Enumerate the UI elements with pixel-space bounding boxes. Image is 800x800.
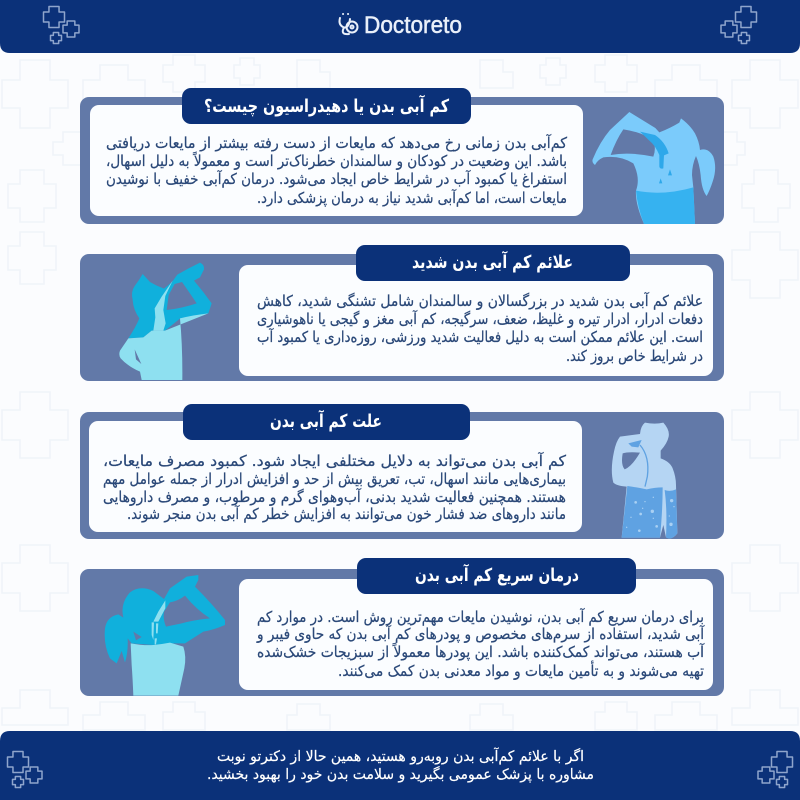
icon: plus cluster right (721, 6, 756, 44)
illustration: man drinking water (119, 263, 212, 380)
text card (89, 421, 582, 532)
heading pill (357, 558, 636, 594)
text card (239, 265, 713, 376)
icon: plus cluster left (44, 6, 79, 44)
heading pill: درمان سریع کم آبی بدن (415, 563, 579, 586)
heading pill (183, 404, 470, 440)
body text: آب هستند، می‌تواند کمک‌کننده باشد. این پودرها معمولاً از سبزیجات خشک‌شده (257, 642, 705, 662)
body text: مانند داروهای ضد فشار خون می‌توانند به افزایش خطر کم آبی بدن منجر شوند. (127, 505, 566, 523)
body text: تهیه می‌شوند و به تأمین مایعات و مواد معدنی بدن کمک می‌کنند. (338, 660, 704, 680)
body text: بیماری‌هایی مانند اسهال، تب، تعریق بیش از حد و افزایش ادرار از جمله عوامل مهم (103, 470, 566, 488)
body text: هستند. همچنین فعالیت شدید بدنی، آب‌وهوای گرم و مرطوب، و مصرف داروهایی (103, 488, 566, 506)
logo: stethoscope icon (340, 14, 358, 34)
heading pill (182, 88, 471, 124)
body text: استفراغ یا کمبود آب در شرایط خاص ایجاد می‌شود. درمان کم‌آبی خفیف با نوشیدن (106, 170, 567, 188)
body text (256, 608, 705, 680)
call to action text: مشاوره با پزشک عمومی بگیرید و سلامت بدن خود را بهبود بخشید. (207, 766, 594, 783)
body text: برای درمان سریع کم آبی بدن، نوشیدن مایعات مهم‌ترین روش است. در موارد کم (257, 608, 704, 626)
call to action text: اگر با علائم کم‌آبی بدن روبه‌رو هستید، همین حالا از دکترتو نوبت (217, 747, 584, 765)
panel: what is dehydration (80, 88, 724, 224)
header bar (0, 0, 800, 53)
text card (90, 105, 583, 216)
body text: کم‌آبی بدن زمانی رخ می‌دهد که مایعات از دست رفته بیشتر از مایعات دریافتی (106, 134, 568, 152)
illustration: person with water level (612, 423, 677, 538)
heading pill: علائم کم آبی بدن شدید (412, 250, 573, 273)
heading pill (356, 245, 630, 281)
body text: آبی شدید، استفاده از سرم‌های مخصوص و پودرهای کم آبی بدن که حاوی فیبر و (256, 625, 705, 644)
footer bar (0, 731, 800, 800)
body text: دفعات ادرار، ادرار تیره و غلیظ، ضعف، سرگیجه، کم آبی مغز و گیجی یا ناهوشیاری (257, 310, 703, 328)
body text: کم آبی بدن می‌تواند به دلایل مختلفی ایجاد شود. کمبود مصرف مایعات، (103, 452, 567, 470)
panel: quick treatment (80, 558, 724, 696)
body text (106, 134, 568, 208)
body text (103, 452, 567, 523)
panel: severe symptoms (80, 245, 724, 381)
icon: plus cluster footer left (8, 752, 42, 788)
body text: علائم کم آبی بدن شدید در بزرگسالان و سالمندان شامل تشنگی شدید، کاهش (257, 292, 703, 310)
body text: در شرایط خاص بروز کند. (566, 347, 703, 365)
call to action text (207, 747, 594, 783)
text card (239, 579, 713, 690)
illustration: woman pouring water (105, 575, 225, 696)
icon: plus cluster footer right (758, 752, 792, 788)
body text (257, 292, 703, 365)
body text: است. این علائم ممکن است به دلیل فعالیت شدید ورزشی، روزه‌داری یا کمبود آب (257, 328, 703, 346)
logo: wordmark: Doctoreto (364, 12, 462, 39)
heading pill: کم آبی بدن یا دهیدراسیون چیست؟ (204, 94, 449, 117)
body text: باشد. این وضعیت در کودکان و سالمندان خطرناک‌تر است و معمولاً به دلیل اسهال، (106, 151, 567, 170)
illustration: woman drinking water (592, 112, 715, 224)
panel: causes (80, 404, 724, 539)
heading pill: علت کم آبی بدن (270, 409, 382, 432)
body text: مایعات است، اما کم‌آبی شدید نیاز به درمان پزشکی دارد. (257, 189, 567, 208)
